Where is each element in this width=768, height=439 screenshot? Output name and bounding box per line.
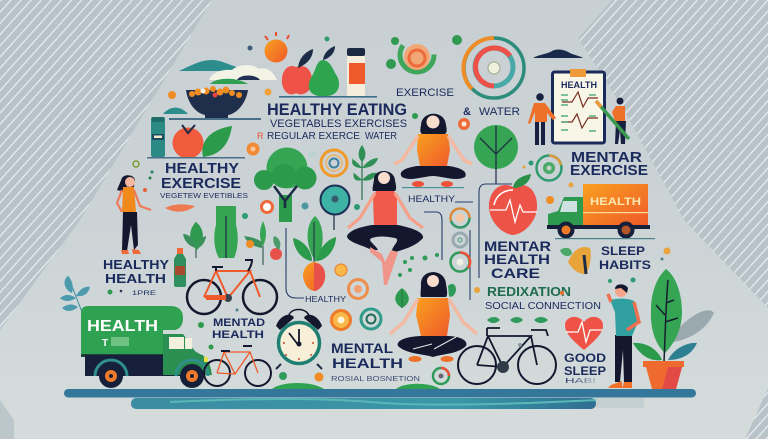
- icon: red apple and leaf: [147, 125, 245, 158]
- exercise label and multi-colour rings: EXERCISE: [396, 87, 454, 99]
- icon: large progress ring: [463, 38, 524, 98]
- heading: healthy health left: HEALTHY: [103, 257, 169, 272]
- heading: sleep habits: HABITS: [599, 260, 651, 272]
- heading: healthy eating: WATER: [365, 131, 397, 142]
- rings beside clock: [279, 372, 324, 382]
- icon: supplement jar: [347, 48, 365, 96]
- heading: mentad health: [198, 308, 265, 350]
- heading: good sleep habits: [564, 351, 606, 385]
- figure: lower meditating woman: [390, 272, 477, 362]
- figures beside clipboard: [528, 93, 629, 145]
- text: redixation: [485, 284, 601, 312]
- orange and teal rings: [332, 264, 381, 330]
- icon: orange delivery truck: HEALTH: [590, 196, 641, 208]
- icon: leaf sprig: [352, 145, 378, 200]
- scattered small icons left: [133, 36, 360, 219]
- heading: healthy health left: 1PRE: [132, 290, 157, 297]
- icon: sun: [264, 32, 289, 62]
- icon: sprig with berries: [244, 221, 282, 265]
- ground water band: [64, 383, 696, 409]
- icon: green circular tree: [474, 125, 518, 184]
- heading: mentar health care: CARE: [491, 265, 540, 281]
- icon: carrot with leaves: [293, 216, 336, 291]
- figure: standing person: [608, 284, 639, 388]
- heading: mentar exercise: MENTAR: [571, 149, 642, 166]
- heading: good sleep habits: HABI: [565, 376, 596, 385]
- dark hill: [533, 50, 583, 58]
- heading: healthy exercise: VEGETEW EVETIBLES: [160, 191, 248, 200]
- text: and water: WATER: [479, 106, 520, 118]
- text: healthy centre label: HEALTHY: [408, 194, 455, 204]
- heading: healthy eating: [257, 101, 407, 142]
- small teal hill: [163, 108, 188, 114]
- icon: plant and green vase: [183, 206, 238, 258]
- icon: orange bicycle: [187, 260, 277, 314]
- icon: potted plant: [633, 269, 714, 389]
- text: redixation: SOCIAL CONNECTION: [485, 300, 601, 312]
- decorative landscape with cloud: [179, 60, 277, 84]
- heading: healthy health left: [103, 257, 169, 297]
- icon: teal leaf branch: [60, 276, 90, 312]
- icon: teal gauge: [320, 186, 350, 230]
- heading: mental health: MENTAL: [331, 340, 393, 356]
- heading: healthy eating: VEGETABLES EXERCISES: [270, 118, 407, 130]
- icon: apple and pear on shelf: [279, 46, 377, 98]
- heading: mentar exercise: EXERCISE: [570, 162, 648, 179]
- heading: mental health: ROSIAL BOSNETION: [331, 374, 420, 383]
- heading: healthy eating: HEALTHY EATING: [267, 101, 407, 119]
- heading: healthy health left: HEALTH: [105, 271, 166, 286]
- heading: mentad health: HEALTH: [212, 329, 264, 341]
- figure: walking woman: [117, 175, 151, 254]
- icon: green delivery truck: [81, 306, 212, 388]
- icon: orange delivery truck: [547, 184, 655, 239]
- heading: healthy exercise: [160, 161, 248, 200]
- icon: clipboard with ECG: HEALTH: [561, 80, 597, 90]
- icon: small leaf by woman: [395, 288, 409, 308]
- icon: drink bottle: [174, 248, 186, 287]
- heading: mentar health care: [484, 238, 551, 281]
- heading: mentar health care: MENTAR: [484, 238, 551, 254]
- thin frame connector: [286, 184, 512, 300]
- icon: ring trio: [450, 208, 470, 272]
- icon: small green ring: [536, 156, 562, 180]
- text: redixation: REDIXATION: [487, 284, 571, 299]
- icon: orange target ring: [321, 150, 347, 176]
- exercise label and multi-colour rings: [386, 35, 462, 99]
- icon: black road bicycle: [458, 328, 556, 384]
- heading: healthy eating: REGULAR EXERCE: [267, 131, 360, 142]
- scattered icons right of centre: [433, 160, 612, 384]
- icon: small orange bicycle: [204, 346, 271, 386]
- heading: sleep habits: SLEEP: [601, 246, 645, 258]
- figure: top meditating woman: [394, 114, 472, 188]
- icon: green delivery truck: T: [102, 338, 108, 349]
- icon: apple with heartbeat: [489, 174, 537, 235]
- heading: good sleep habits: GOOD: [564, 351, 606, 365]
- heading: mentar health care: HEALTH: [484, 251, 550, 267]
- icon: clipboard with ECG: [552, 69, 604, 143]
- heading: healthy exercise: EXERCISE: [161, 176, 241, 192]
- icon: green delivery truck: HEALTH: [87, 318, 158, 335]
- heading: sleep habits: [599, 246, 670, 282]
- icon: herb bundle: [560, 247, 591, 274]
- heading: healthy exercise: HEALTHY: [165, 161, 239, 177]
- heading: mentad health: MENTAD: [213, 317, 265, 329]
- icon: green tree: [254, 148, 316, 222]
- small green sprigs around centre: [398, 253, 548, 323]
- heading: mentar exercise: [570, 149, 648, 179]
- heading: healthy eating: R: [257, 131, 264, 141]
- figure: centre meditating woman: [347, 171, 423, 285]
- heading: mental health: HEALTH: [332, 355, 403, 371]
- text: healthy small: HEALTHY: [305, 295, 347, 304]
- icon: water bottle: [151, 117, 165, 157]
- icon: heart with pulse: [565, 317, 603, 350]
- heading: good sleep habits: SLEEP: [564, 364, 606, 378]
- heading: mental health: [331, 340, 420, 383]
- text: and water: &: [463, 106, 471, 118]
- text: and water: [412, 106, 520, 130]
- icon: alarm clock: [276, 310, 322, 369]
- icon: food bowl: [169, 86, 261, 120]
